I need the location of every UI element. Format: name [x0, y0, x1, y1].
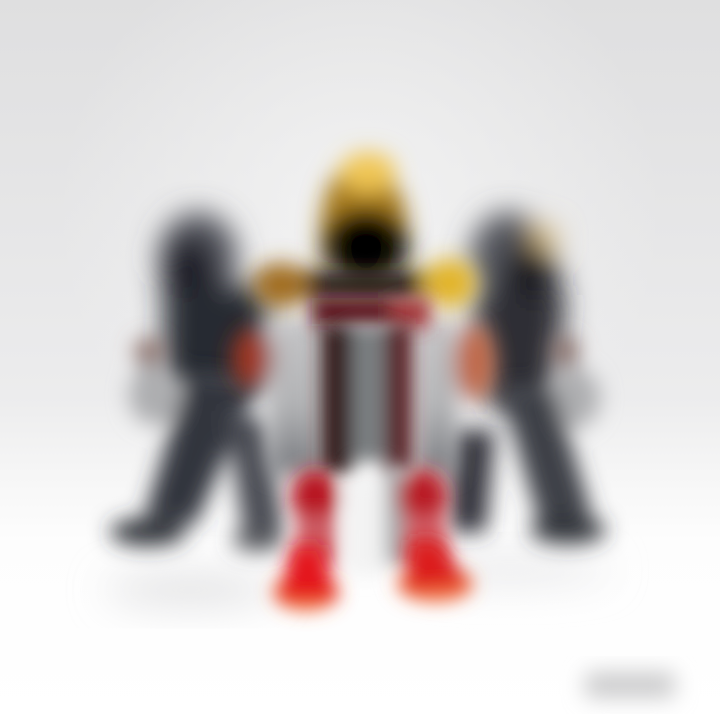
floor shadow	[105, 558, 610, 602]
feet	[273, 540, 473, 611]
arms and grey gaps	[232, 320, 495, 475]
blurred watermark box	[585, 672, 675, 698]
legs and torso strips	[320, 324, 413, 474]
figure: central yellow and red robot	[232, 152, 495, 611]
helmet	[320, 152, 410, 281]
shoulders	[253, 259, 476, 307]
lower legs	[291, 465, 448, 575]
chest	[312, 298, 430, 328]
figure: left grey robot	[110, 212, 284, 551]
figure: right grey robot	[450, 212, 606, 544]
